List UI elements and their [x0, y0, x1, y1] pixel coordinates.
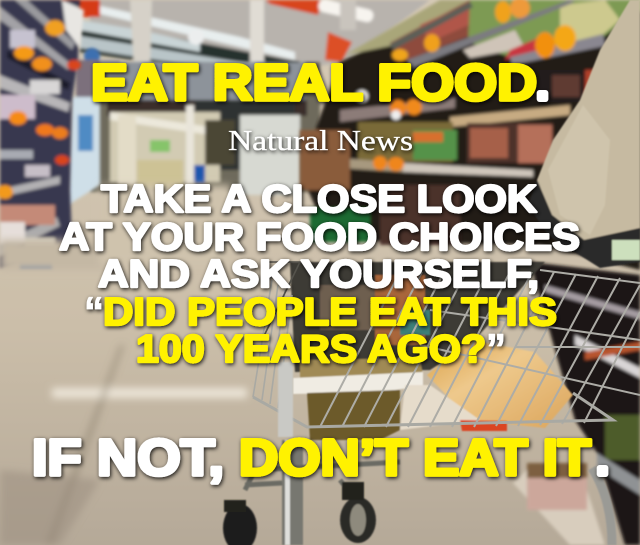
body text: white lines: AT YOUR FOOD CHOICES	[59, 216, 580, 259]
right lower shelves	[513, 262, 640, 545]
right shelves	[300, 0, 640, 270]
quoted question in yellow: “	[84, 288, 104, 335]
quoted question in yellow: 100 YEARS AGO?	[136, 328, 486, 371]
floor shading and highlights	[0, 185, 247, 545]
store banner	[68, 48, 100, 205]
cart contents	[290, 262, 573, 440]
closing line: If not, don't eat it: DON’T EAT IT	[239, 429, 591, 486]
closing line: If not, don't eat it: .	[597, 439, 608, 483]
quoted question in yellow: ”	[486, 325, 506, 372]
closing line: If not, don't eat it	[32, 429, 608, 486]
brand: Natural News: Natural News	[228, 125, 413, 157]
cart wires	[320, 270, 640, 427]
quoted question in yellow	[84, 288, 557, 372]
body text: white lines: TAKE A CLOSE LOOK	[101, 178, 537, 221]
ceiling	[62, 0, 430, 85]
shopping cart	[223, 262, 640, 545]
body text: white lines	[59, 178, 580, 296]
cart frame and wheels	[223, 362, 612, 545]
body text: white lines: AND ASK YOURSELF,	[98, 253, 539, 296]
back of store	[90, 60, 320, 195]
shopper's jacket sleeve	[528, 0, 640, 268]
left shelves	[0, 0, 84, 268]
closing line: If not, don't eat it: IF NOT,	[32, 429, 224, 486]
title: Eat Real Food: EAT REAL FOOD	[91, 54, 537, 111]
title: Eat Real Food: .	[537, 64, 548, 108]
quoted question in yellow: DID PEOPLE EAT THIS	[103, 291, 557, 334]
